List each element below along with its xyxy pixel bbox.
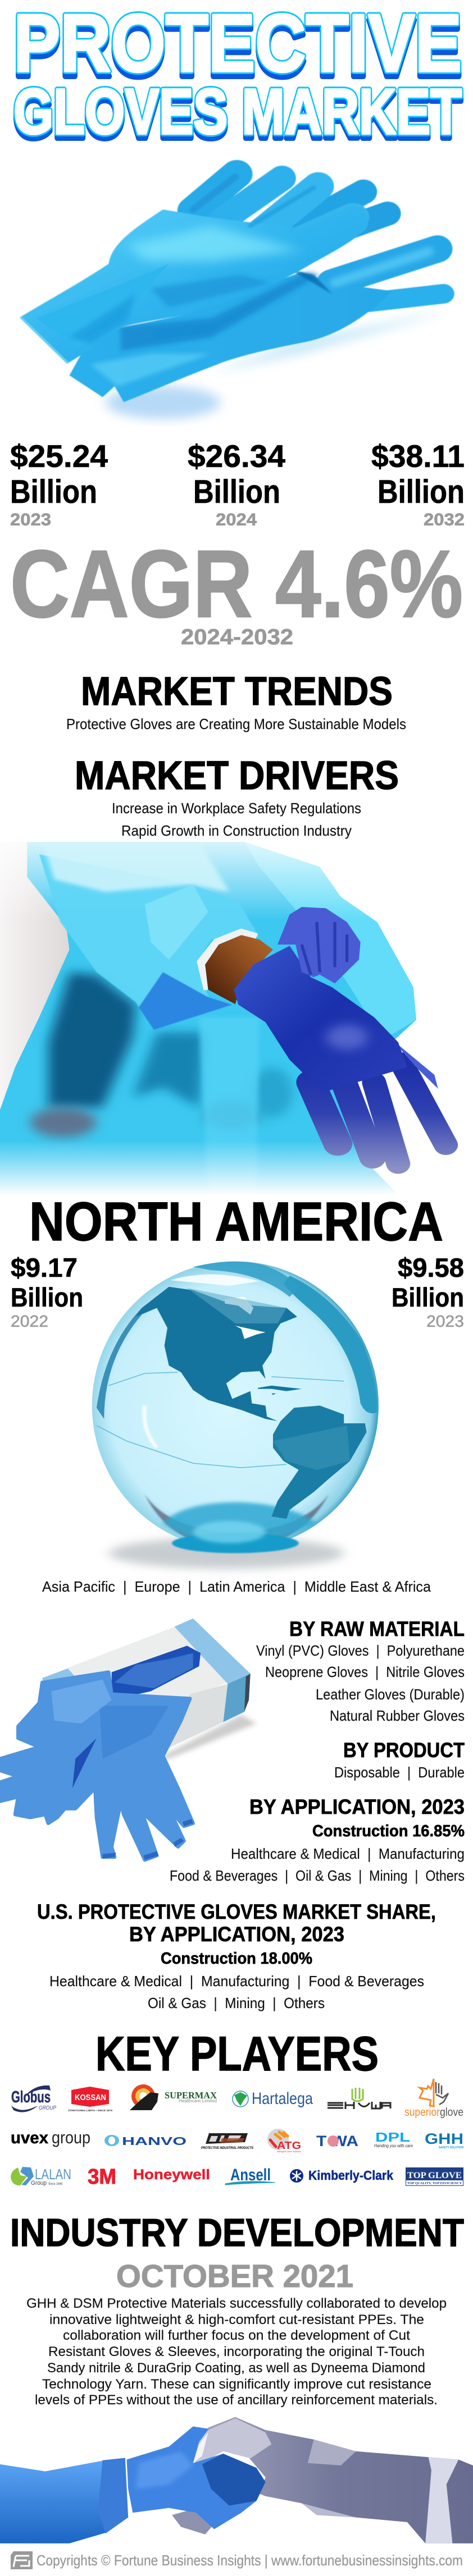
stat: north america 2023: $9.58: [398, 1253, 464, 1282]
logo: uvex group: [11, 2128, 90, 2147]
footer: [11, 2551, 463, 2569]
stat: north america 2022: 2022: [11, 1313, 48, 1331]
stat: north america 2022: [11, 1253, 83, 1331]
logo: Superior Glove: [404, 2079, 463, 2119]
industry development paragraph: GHH & DSM Protective Materials successfully collaborated to develop: [26, 2296, 447, 2311]
regions list: Asia Pacific | Europe | Latin America | Middle East & Africa: [42, 1578, 431, 1595]
segment: U.S. market share: Healthcare & Medical | Manufacturing | Food & Beverages: [49, 1973, 424, 1990]
industry development paragraph: collaboration will further focus on the development of Cut: [63, 2328, 410, 2343]
logo: DPL: Handing you with care: [374, 2143, 413, 2148]
photo: box of blue gloves: [0, 1619, 256, 1860]
continent: south america: [271, 1405, 366, 1519]
blue sleeve: [0, 2461, 106, 2543]
logo: GHH: GHH: [425, 2130, 463, 2147]
stat: 2032 market size: $38.11: [371, 438, 465, 474]
industry development paragraph: innovative lightweight & high-comfort cut-resistant PPEs. The: [49, 2312, 424, 2327]
grey fingers: [172, 2509, 215, 2534]
title: [13, 0, 462, 152]
stat: north america 2023: [392, 1253, 464, 1331]
blue glove: [234, 907, 446, 1164]
logo: Hartalega: [233, 2089, 313, 2108]
stat: 2023 market size: [10, 438, 108, 529]
logo: Kimberly-Clark: Kimberly-Clark: [308, 2168, 393, 2183]
logo: Lalan: LALAN: [35, 2166, 71, 2183]
logo: uvex group: group: [52, 2128, 90, 2147]
logo: Superior Glove: glove: [440, 2106, 463, 2119]
logo: Kossan: KOSSAN: [75, 2093, 106, 2102]
photo: blue gloves: [21, 174, 452, 419]
segment: U.S. market share: BY APPLICATION, 2023: [129, 1923, 344, 1946]
logo: Top Glove: [406, 2167, 463, 2186]
segment: by raw material: [256, 1617, 465, 1724]
segment: by application: Construction 16.85%: [312, 1822, 465, 1840]
logo: Ansell: Ansell: [230, 2166, 271, 2184]
stat: 2023 market size: Billion: [10, 474, 97, 510]
logo: Hanvo: HANVO: [122, 2135, 187, 2148]
photo: handshake with gloves: [0, 2417, 473, 2543]
continent: north america: [136, 1287, 297, 1421]
market drivers list: Rapid Growth in Construction Industry: [121, 822, 352, 839]
continent: caribbean: [258, 1386, 302, 1395]
blue gloved hand: [127, 2427, 266, 2529]
heading: market drivers: MARKET DRIVERS: [75, 754, 399, 798]
logo: Honeywell: Honeywell: [133, 2167, 210, 2183]
title shadow layer: [13, 2, 462, 152]
globe rim: [284, 1276, 377, 1413]
date: october 2021: OCTOBER 2021: [116, 2258, 353, 2294]
logo: Lalan: [11, 2166, 71, 2187]
icon: Fortune Business Insights logo: [11, 2551, 33, 2569]
logo: Top Glove: TOP GLOVE: [407, 2171, 462, 2180]
logo: Globus: [11, 2085, 56, 2112]
logo: Supermax: [130, 2084, 217, 2110]
industry development paragraph: levels of PPEs without the use of ancillary reinforcement materials.: [35, 2392, 438, 2408]
industry development paragraph: Technology Yarn. These can significantly improve cut resistance: [42, 2377, 431, 2392]
logo: Showa: [328, 2088, 390, 2109]
logo: Kossan: [68, 2087, 113, 2112]
segment: by product: [334, 1739, 465, 1781]
gloves: [0, 1672, 193, 1860]
logo: ATG: ATG: [277, 2140, 301, 2151]
lower glove: [70, 249, 443, 402]
logo: PIP: [201, 2133, 253, 2150]
sleeve: [39, 842, 260, 1030]
stat: 2024 market size: 2024: [216, 510, 257, 529]
photo: gowned worker pulling on a blue glove: [0, 842, 446, 1198]
stat: north america 2022: Billion: [11, 1282, 83, 1312]
logo: Globus: Globus: [11, 2088, 51, 2106]
logo: Supermax: Healthcare Limited: [179, 2098, 217, 2103]
title white face: [13, 0, 462, 148]
market trends text: Protective Gloves are Creating More Sustainable Models: [66, 716, 406, 732]
segment: U.S. market share: Construction 18.00%: [161, 1950, 312, 1968]
logo: Top Glove: TOP QUALITY, TOP EFFICIENCY: [407, 2181, 462, 2185]
heading: market trends: MARKET TRENDS: [81, 670, 393, 714]
logo: Kossan: STRETCHING LIMITS • SINCE 1979: [68, 2109, 113, 2112]
logo: DPL: [374, 2130, 413, 2148]
icon: glass globe: [92, 1261, 379, 1569]
stat: 2032 market size: [371, 438, 465, 529]
segment: U.S. market share: [37, 1900, 436, 2011]
segment: by application: [170, 1795, 465, 1884]
stat: 2024 market size: Billion: [193, 474, 280, 510]
blue cuff: [98, 2458, 128, 2533]
logo: Lalan: Group: [31, 2180, 47, 2187]
logo: Supermax: SUPERMAX: [165, 2090, 217, 2101]
stat: 2023 market size: 2023: [10, 510, 51, 529]
logo: Globus: GROUP: [39, 2105, 56, 2111]
heading: key players: KEY PLAYERS: [95, 2027, 379, 2081]
logo: Hartalega: Hartalega: [252, 2089, 313, 2108]
back fingers: [302, 192, 388, 231]
CAGR period: 2024-2032: [181, 625, 293, 649]
logo: ATG: Intelligent Glove Solutions: [277, 2150, 301, 2153]
logo: DPL: DPL: [375, 2130, 410, 2144]
logos: key players: [11, 2079, 463, 2189]
stat: north america 2023: Billion: [392, 1282, 464, 1312]
logo: Hanvo: [104, 2135, 187, 2148]
grey arm: [190, 2417, 473, 2543]
stat: north america 2022: $9.17: [11, 1253, 78, 1282]
segment: U.S. market share: Oil & Gas | Mining | Others: [148, 1995, 325, 2011]
stat: 2024 market size: $26.34: [188, 438, 285, 474]
logo: PIP: PROTECTIVE INDUSTRIAL PRODUCTS: [201, 2147, 253, 2150]
upper glove: [21, 174, 368, 363]
stat: 2024 market size: [188, 438, 285, 529]
logo: Superior Glove: superior: [404, 2106, 440, 2119]
stat: 2023 market size: $25.24: [10, 438, 108, 474]
stat: 2032 market size: 2032: [424, 510, 465, 529]
logo: uvex group: uvex: [11, 2129, 48, 2147]
title cyan outline layer: [13, 0, 462, 148]
logo: Lalan: Since 1948: [48, 2183, 63, 2186]
logo: 3M: 3M: [88, 2165, 116, 2189]
cuff and wrist: [202, 933, 273, 1004]
logo: ATG: [267, 2129, 301, 2153]
industry development paragraph: Sandy nitrile & DuraGrip Coating, as well as Dyneema Diamond: [47, 2360, 425, 2376]
industry development paragraph: [26, 2296, 447, 2408]
stat: north america 2023: 2023: [426, 1313, 464, 1331]
logo: GHH: SAFETY SOLUTION: [439, 2146, 463, 2149]
market drivers list: Increase in Workplace Safety Regulations: [112, 800, 361, 817]
industry development paragraph: Resistant Gloves & Sleeves, incorporating the original T-Touch: [48, 2344, 425, 2359]
market drivers list: [112, 800, 361, 839]
logo: Towa: T WA: [316, 2133, 358, 2149]
